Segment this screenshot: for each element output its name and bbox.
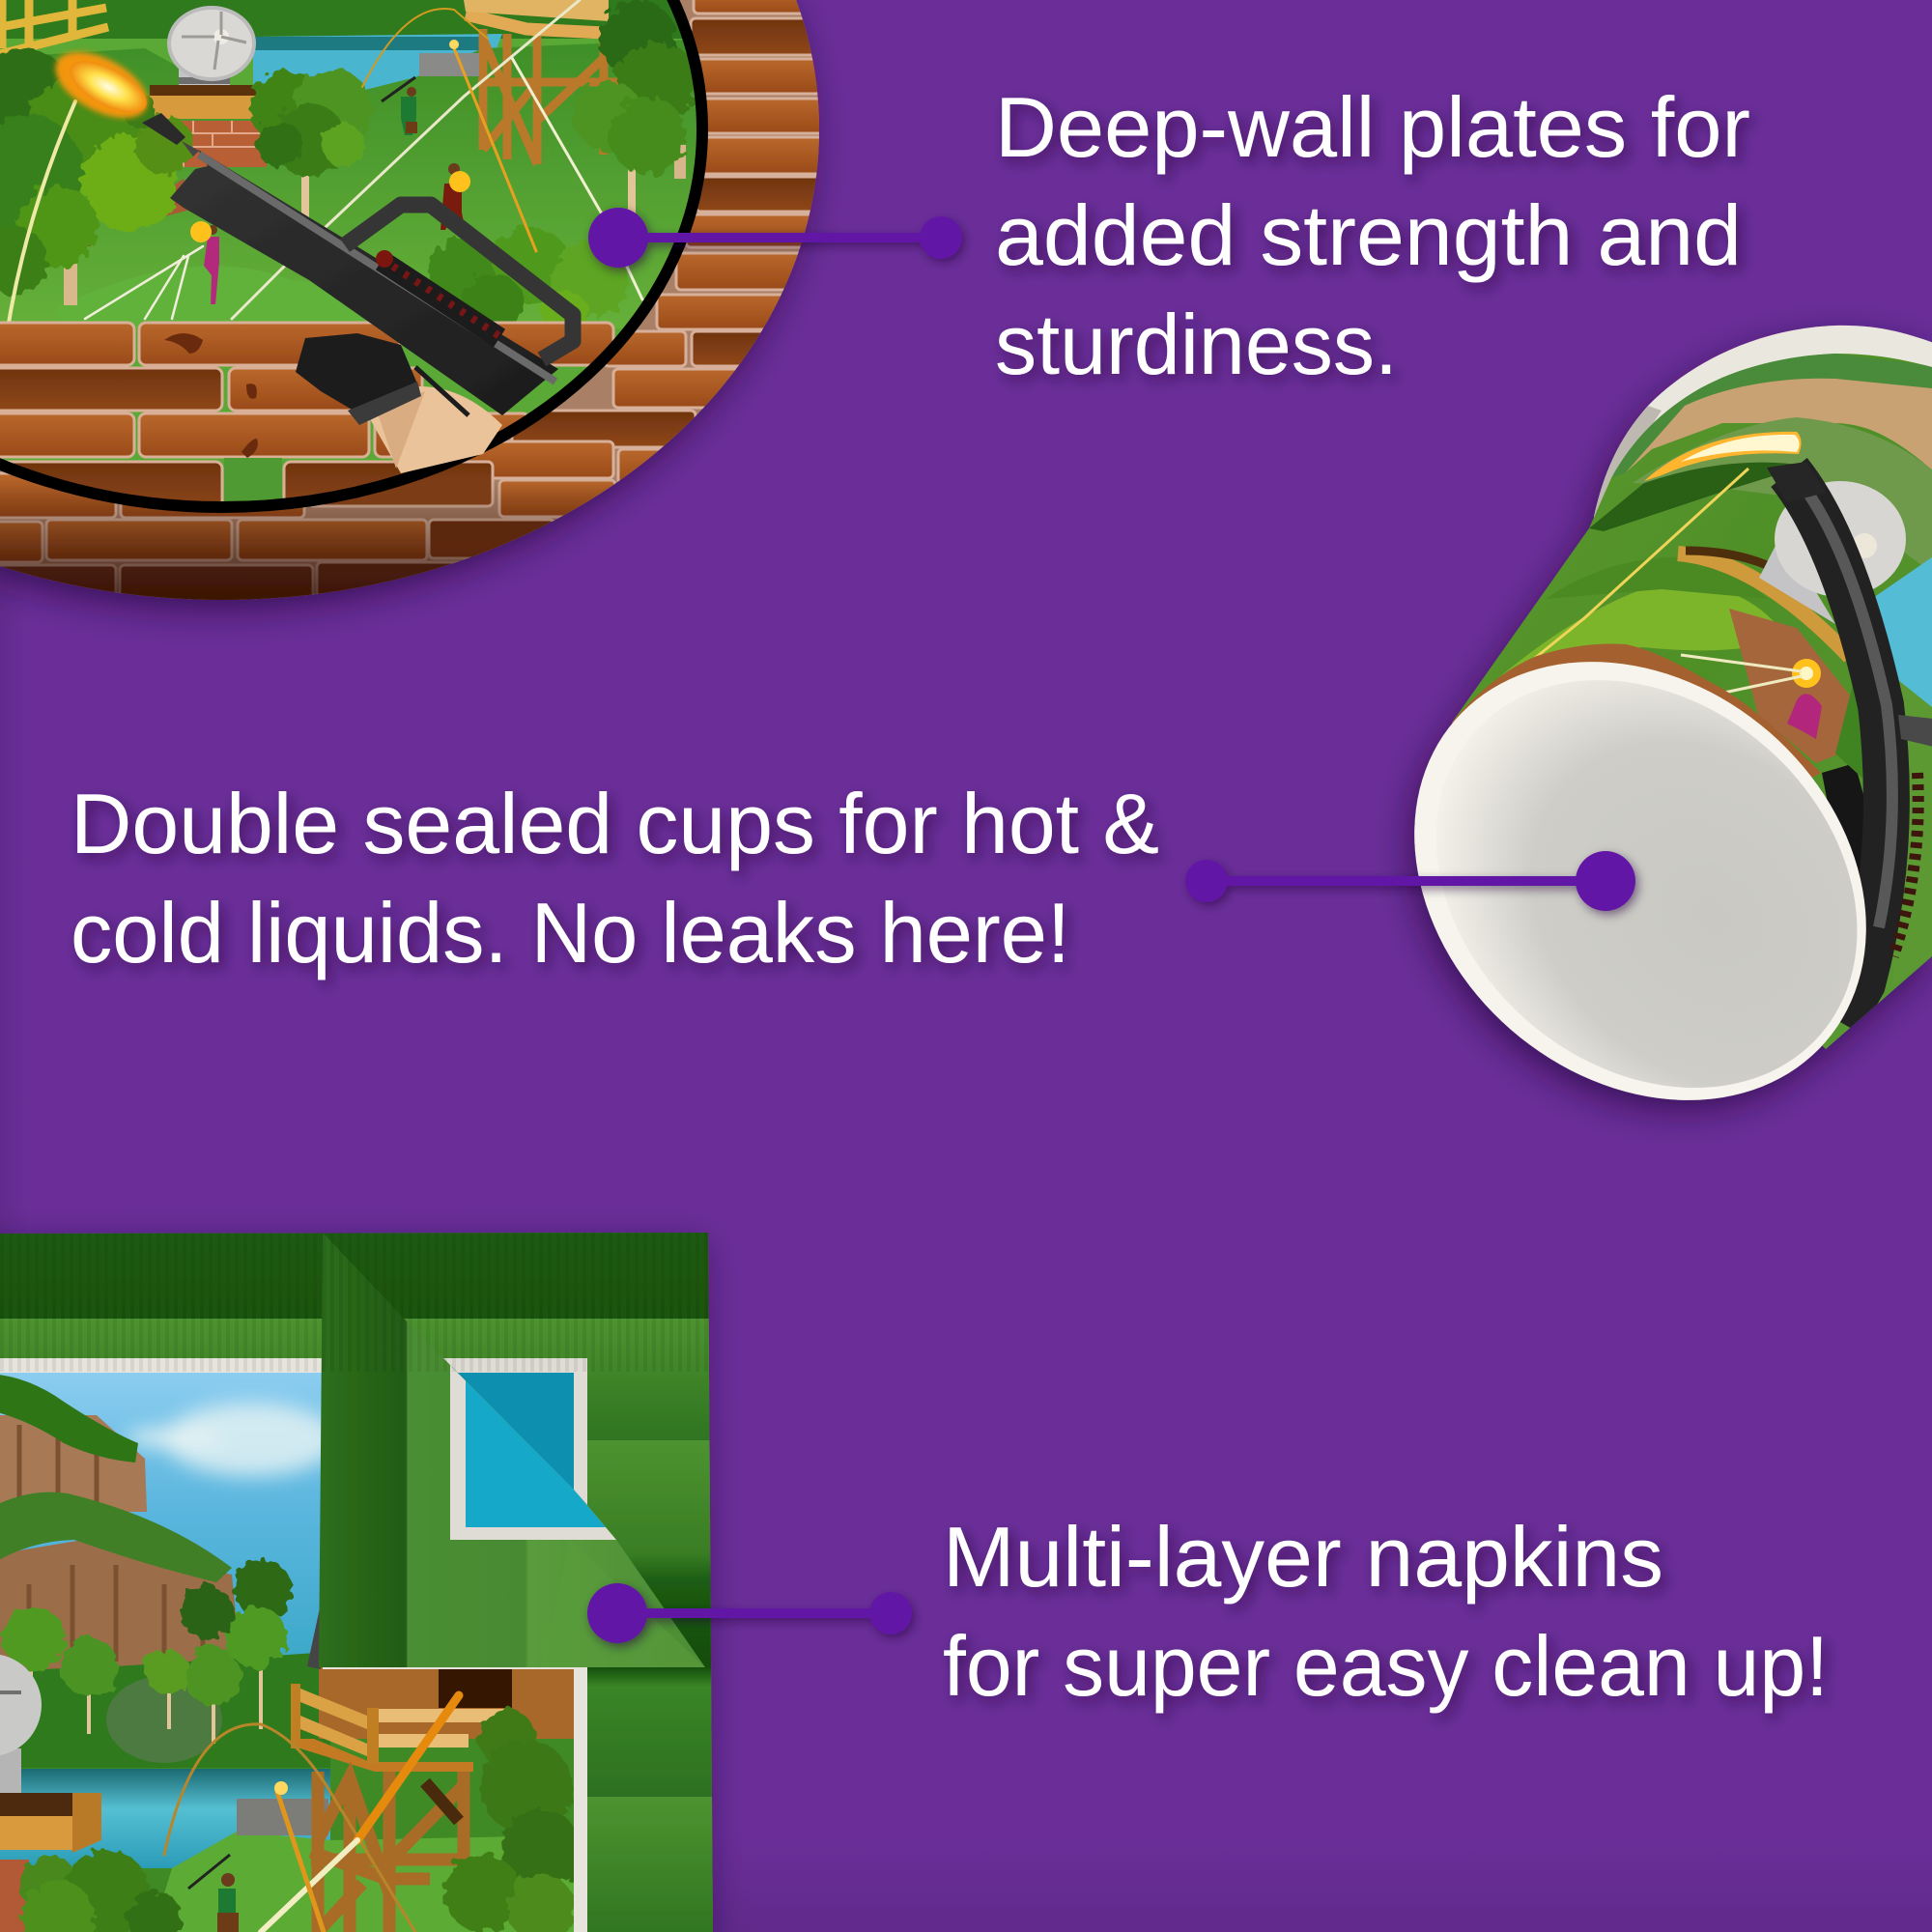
tiny player xyxy=(188,1781,288,1932)
clouds xyxy=(126,1403,338,1476)
tree hut xyxy=(291,1604,574,1772)
lake xyxy=(253,34,502,90)
cliffs xyxy=(0,1415,147,1512)
brick patch xyxy=(1729,609,1850,763)
callout: napkin pointer xyxy=(587,1583,912,1643)
cup base xyxy=(1325,571,1932,1191)
text: multi-layer napkins xyxy=(943,1509,1829,1714)
muzzle flash xyxy=(44,39,158,131)
wood platform and brick base xyxy=(150,96,255,119)
text: double sealed cups: cold liquids. No leaks here! xyxy=(71,885,1070,980)
pool square xyxy=(450,1358,634,1540)
gun on cup xyxy=(1789,472,1887,1022)
glove on cup xyxy=(1822,763,1879,927)
text: double sealed cups xyxy=(71,776,1159,980)
wooden box xyxy=(0,1793,101,1932)
paintball gun xyxy=(142,113,573,415)
light foliage xyxy=(1478,585,1787,696)
mid-fold shading xyxy=(541,1540,705,1667)
flash band xyxy=(1644,432,1802,481)
cup wall xyxy=(1430,319,1932,1072)
trees xyxy=(0,0,697,305)
foreground grass xyxy=(164,1832,574,1932)
tracer lines xyxy=(0,0,642,386)
napkin base xyxy=(0,1227,724,1932)
text: deep-wall plates: sturdiness. xyxy=(995,297,1398,392)
picture panel: sky xyxy=(0,1358,330,1373)
cup product image xyxy=(1325,319,1932,1191)
napkin product image xyxy=(0,1227,724,1932)
teal lake xyxy=(1870,551,1932,763)
distant trees xyxy=(3,1560,292,1744)
bushes xyxy=(19,1710,582,1932)
folded napkin flap xyxy=(319,1227,715,1671)
tower legs xyxy=(311,1772,464,1932)
lake xyxy=(0,1769,330,1868)
tiny players xyxy=(190,40,470,304)
white frame xyxy=(574,1667,587,1932)
pool on top layer behind fold xyxy=(458,1373,574,1490)
distant hill xyxy=(1633,417,1932,580)
tan platform band xyxy=(1678,554,1850,657)
text: deep-wall plates xyxy=(995,79,1750,392)
dark foliage strip xyxy=(1589,463,1806,531)
plate illustrated scene xyxy=(0,0,724,531)
fan dish xyxy=(169,8,254,99)
text: deep-wall plates: Deep-wall plates for xyxy=(995,79,1750,175)
text: multi-layer napkins: Multi-layer napkins xyxy=(943,1509,1663,1605)
top-left yellow tower xyxy=(0,0,108,54)
inner wall bricks xyxy=(0,323,613,516)
tracers xyxy=(164,1695,459,1932)
text: multi-layer napkins: for super easy clean up! xyxy=(943,1618,1829,1714)
brick rim above base xyxy=(1452,644,1821,869)
napkin ribbing xyxy=(0,1227,724,1372)
grass streaks xyxy=(148,267,272,274)
callout: cup pointer xyxy=(1185,851,1635,911)
plate product image xyxy=(0,0,840,609)
plate ring xyxy=(0,0,702,507)
corrugated fence xyxy=(237,1799,328,1835)
fan dish on cup xyxy=(1759,534,1835,624)
front bushes xyxy=(427,224,632,321)
fan dish xyxy=(0,1654,42,1816)
tower xyxy=(466,14,623,164)
arm and glove xyxy=(296,333,502,473)
brick chips xyxy=(164,333,258,458)
tan stone band xyxy=(1626,379,1932,478)
hill caps xyxy=(0,1374,138,1463)
text: double sealed cups: Double sealed cups for hot & xyxy=(71,776,1159,871)
callout: plate pointer xyxy=(588,208,962,268)
text: deep-wall plates: added strength and xyxy=(995,187,1742,283)
corrugated fence xyxy=(419,53,479,76)
plate rim bricks xyxy=(0,0,826,604)
green band xyxy=(1611,354,1932,478)
cup rim xyxy=(1594,326,1932,541)
lower right foliage xyxy=(1893,676,1932,985)
far ground xyxy=(0,1652,330,1768)
cup tracer xyxy=(1459,469,1748,720)
